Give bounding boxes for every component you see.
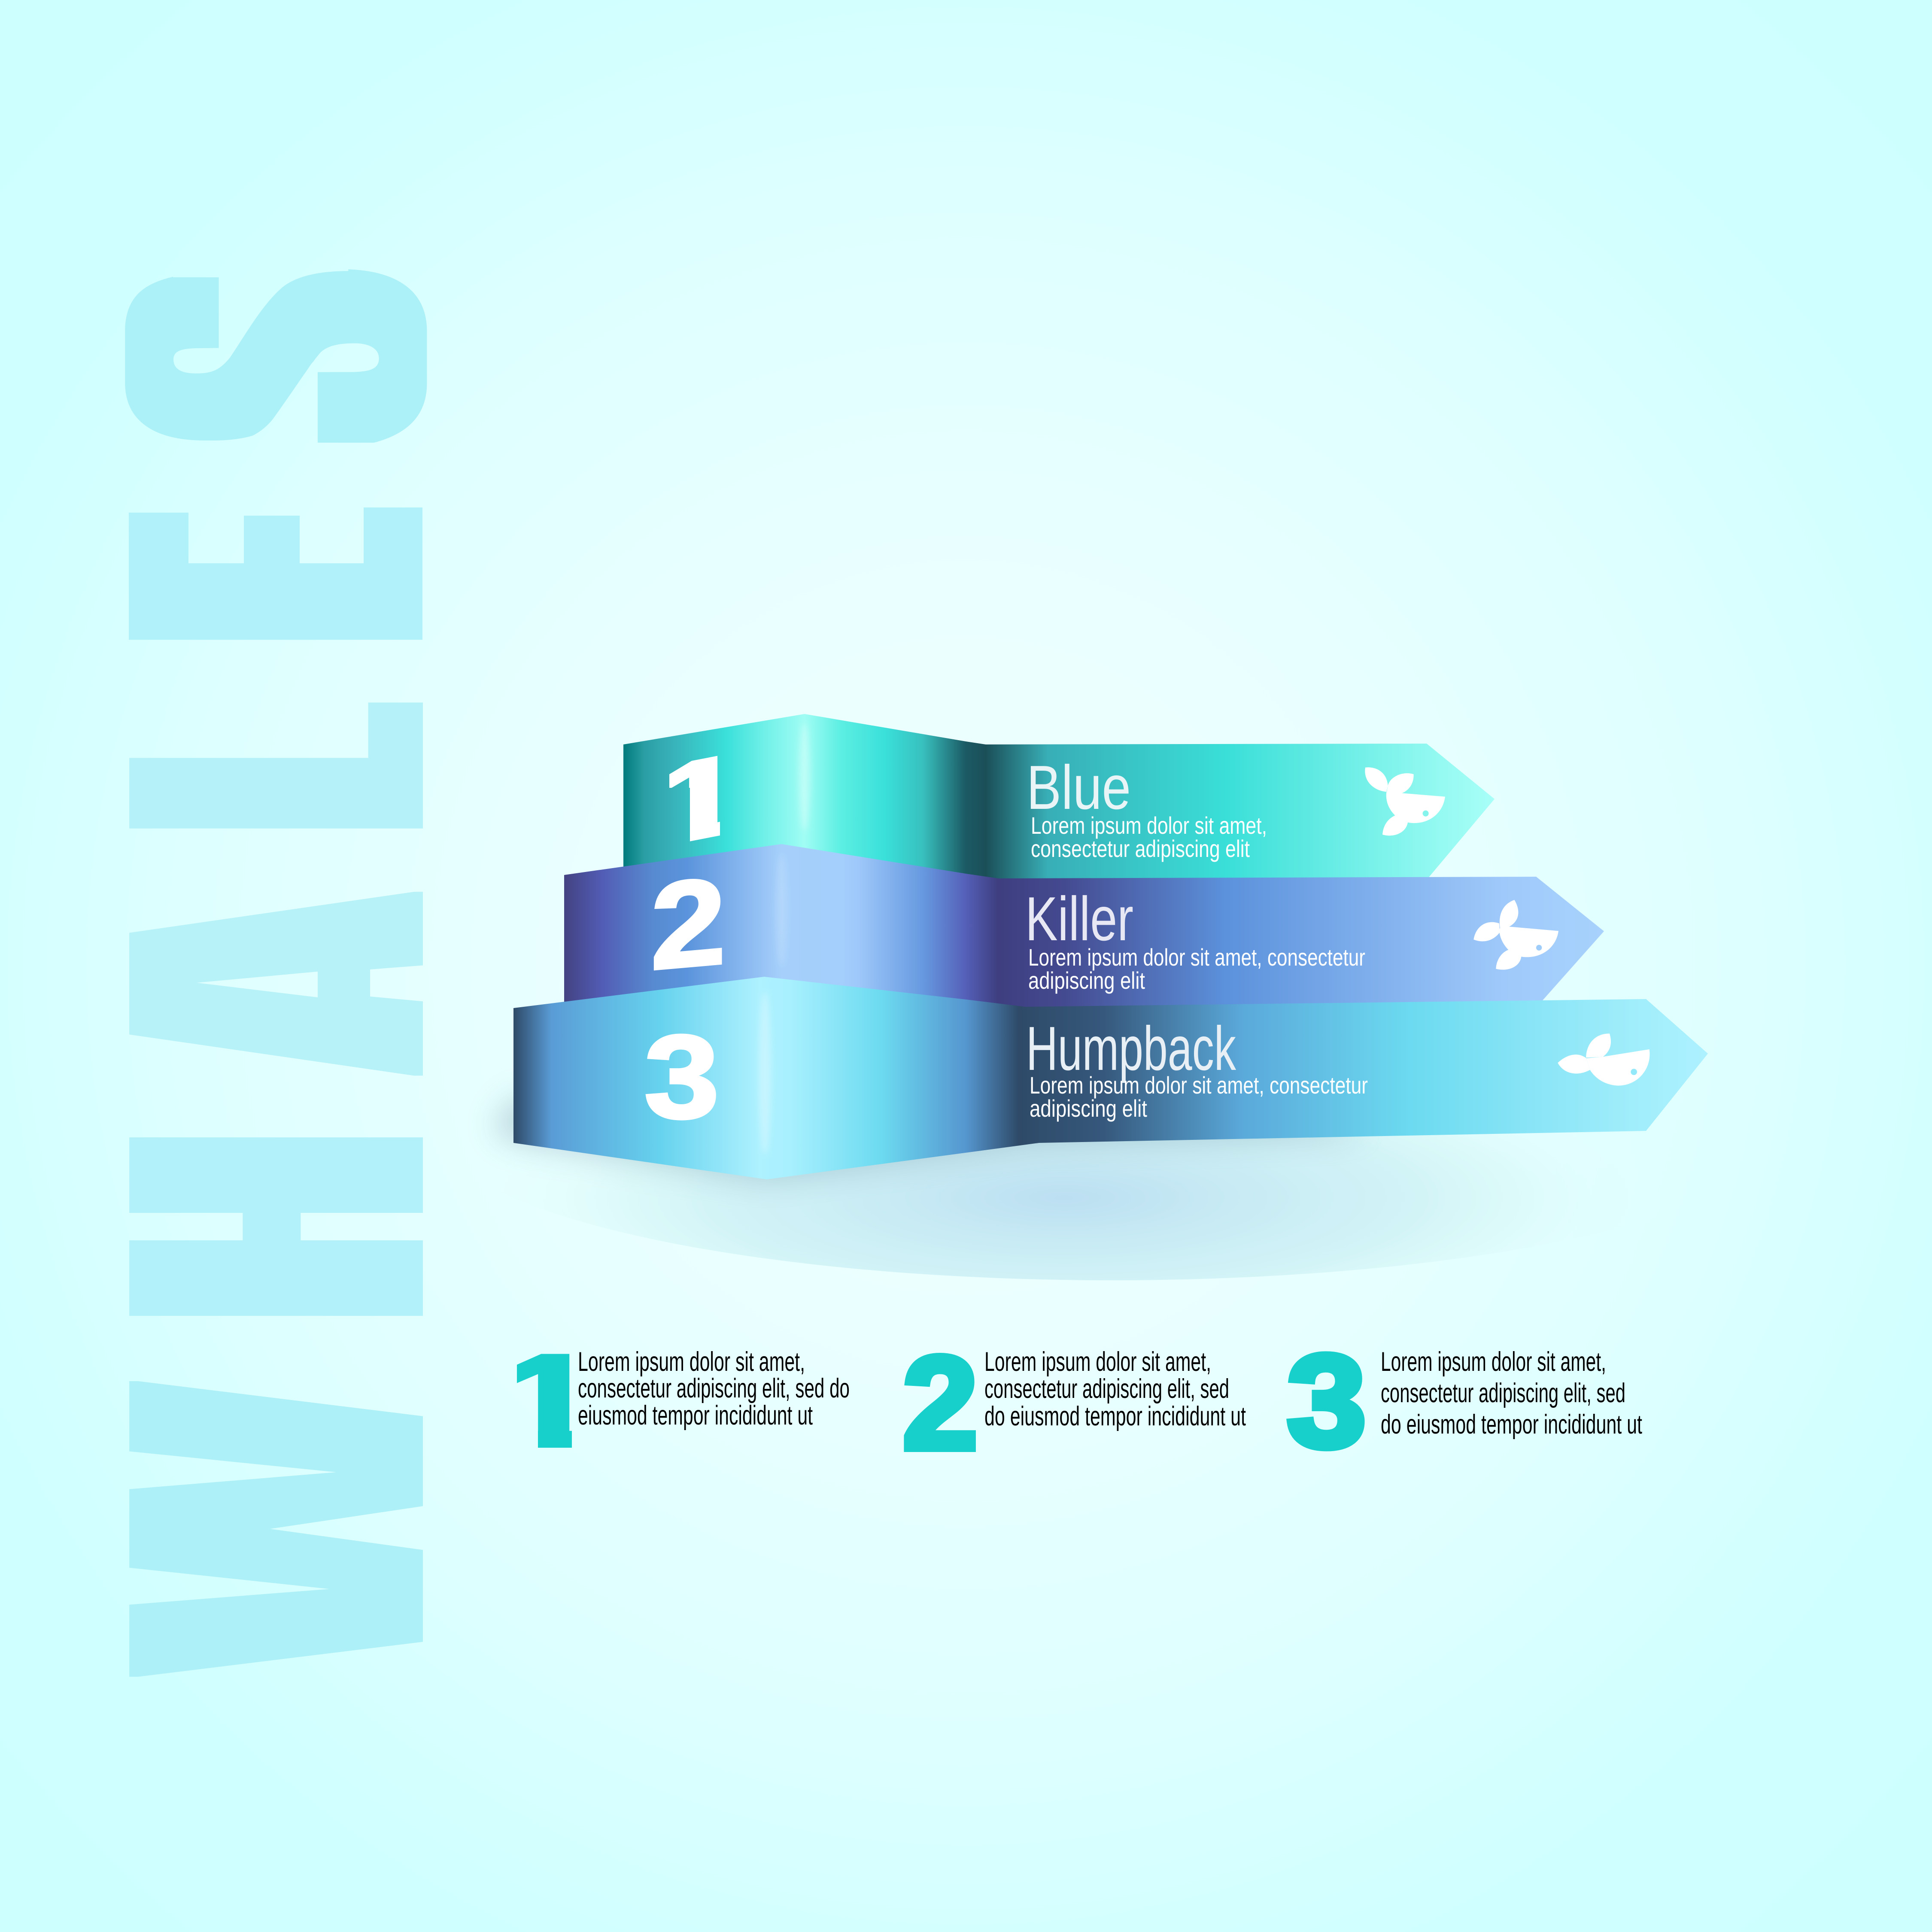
- title: WHALES: E: [50, 527, 499, 621]
- description Blue: consectetur adipiscing elit: [1031, 835, 1250, 862]
- title: WHALES: S: [44, 287, 507, 428]
- heading Killer: Killer: [1025, 884, 1133, 954]
- title: WHALES: L: [43, 723, 507, 814]
- heading Humpback: Humpback: [1026, 1014, 1236, 1083]
- title: WHALES: H: [43, 1143, 507, 1310]
- note 3 text: do eiusmod tempor incididunt ut: [1381, 1410, 1642, 1440]
- ribbon 1: Blue: [623, 714, 1495, 884]
- note 2 text: consectetur adipiscing elit, sed: [984, 1374, 1229, 1404]
- note 1 text: [578, 1347, 850, 1431]
- teal numeral 3: 3: [1287, 1328, 1366, 1474]
- ribbon 2 fold highlight: [776, 854, 787, 966]
- note 1 text: consectetur adipiscing elit, sed do: [578, 1373, 850, 1403]
- icon: whale: [1473, 900, 1558, 970]
- description Killer: [1028, 944, 1365, 994]
- note 1: [496, 1327, 850, 1474]
- description Blue: Lorem ipsum dolor sit amet,: [1031, 812, 1267, 839]
- note 3 text: [1381, 1347, 1642, 1440]
- teal numeral 1: 1: [496, 1327, 602, 1474]
- ribbon 1 band: [623, 714, 1495, 884]
- description Killer: adipiscing elit: [1028, 967, 1145, 994]
- title: WHALES: W: [44, 1434, 507, 1622]
- note 3 text: Lorem ipsum dolor sit amet,: [1381, 1347, 1606, 1377]
- ribbon 3: Humpback: [513, 977, 1708, 1179]
- ground shadow: [434, 969, 1790, 1280]
- teal numeral 2: 2: [903, 1329, 978, 1476]
- note 2 text: do eiusmod tempor incididunt ut: [984, 1401, 1246, 1431]
- note 3 text: consectetur adipiscing elit, sed: [1381, 1378, 1625, 1408]
- icon: whale: [1558, 1033, 1649, 1086]
- note 2 text: [984, 1347, 1246, 1431]
- heading Blue: Blue: [1027, 753, 1131, 822]
- description Humpback: adipiscing elit: [1030, 1095, 1147, 1122]
- ribbon 1 fold highlight: [799, 723, 810, 831]
- note 1 text: Lorem ipsum dolor sit amet,: [578, 1347, 805, 1377]
- ribbon 3 band: [513, 977, 1708, 1179]
- title: WHALES: A: [44, 924, 507, 1043]
- number 2: 2: [651, 852, 726, 995]
- note 2: [903, 1329, 1246, 1476]
- description Humpback: [1030, 1072, 1368, 1122]
- ribbon 2 band: [564, 844, 1604, 1008]
- description Killer: Lorem ipsum dolor sit amet, consectetur: [1028, 944, 1365, 971]
- description Blue: [1031, 812, 1267, 862]
- description Humpback: Lorem ipsum dolor sit amet, consectetur: [1030, 1072, 1368, 1099]
- note 3: [1287, 1328, 1642, 1474]
- icon: whale: [1365, 767, 1445, 835]
- note 2 text: Lorem ipsum dolor sit amet,: [984, 1347, 1211, 1377]
- note 1 text: eiusmod tempor incididunt ut: [578, 1400, 813, 1431]
- number 3: 3: [644, 1011, 719, 1143]
- ribbon 3 fold highlight: [759, 992, 771, 1155]
- title: WHALES: [43, 260, 507, 1622]
- ribbon 2: Killer: [564, 844, 1604, 1008]
- number 1: 1: [649, 726, 749, 872]
